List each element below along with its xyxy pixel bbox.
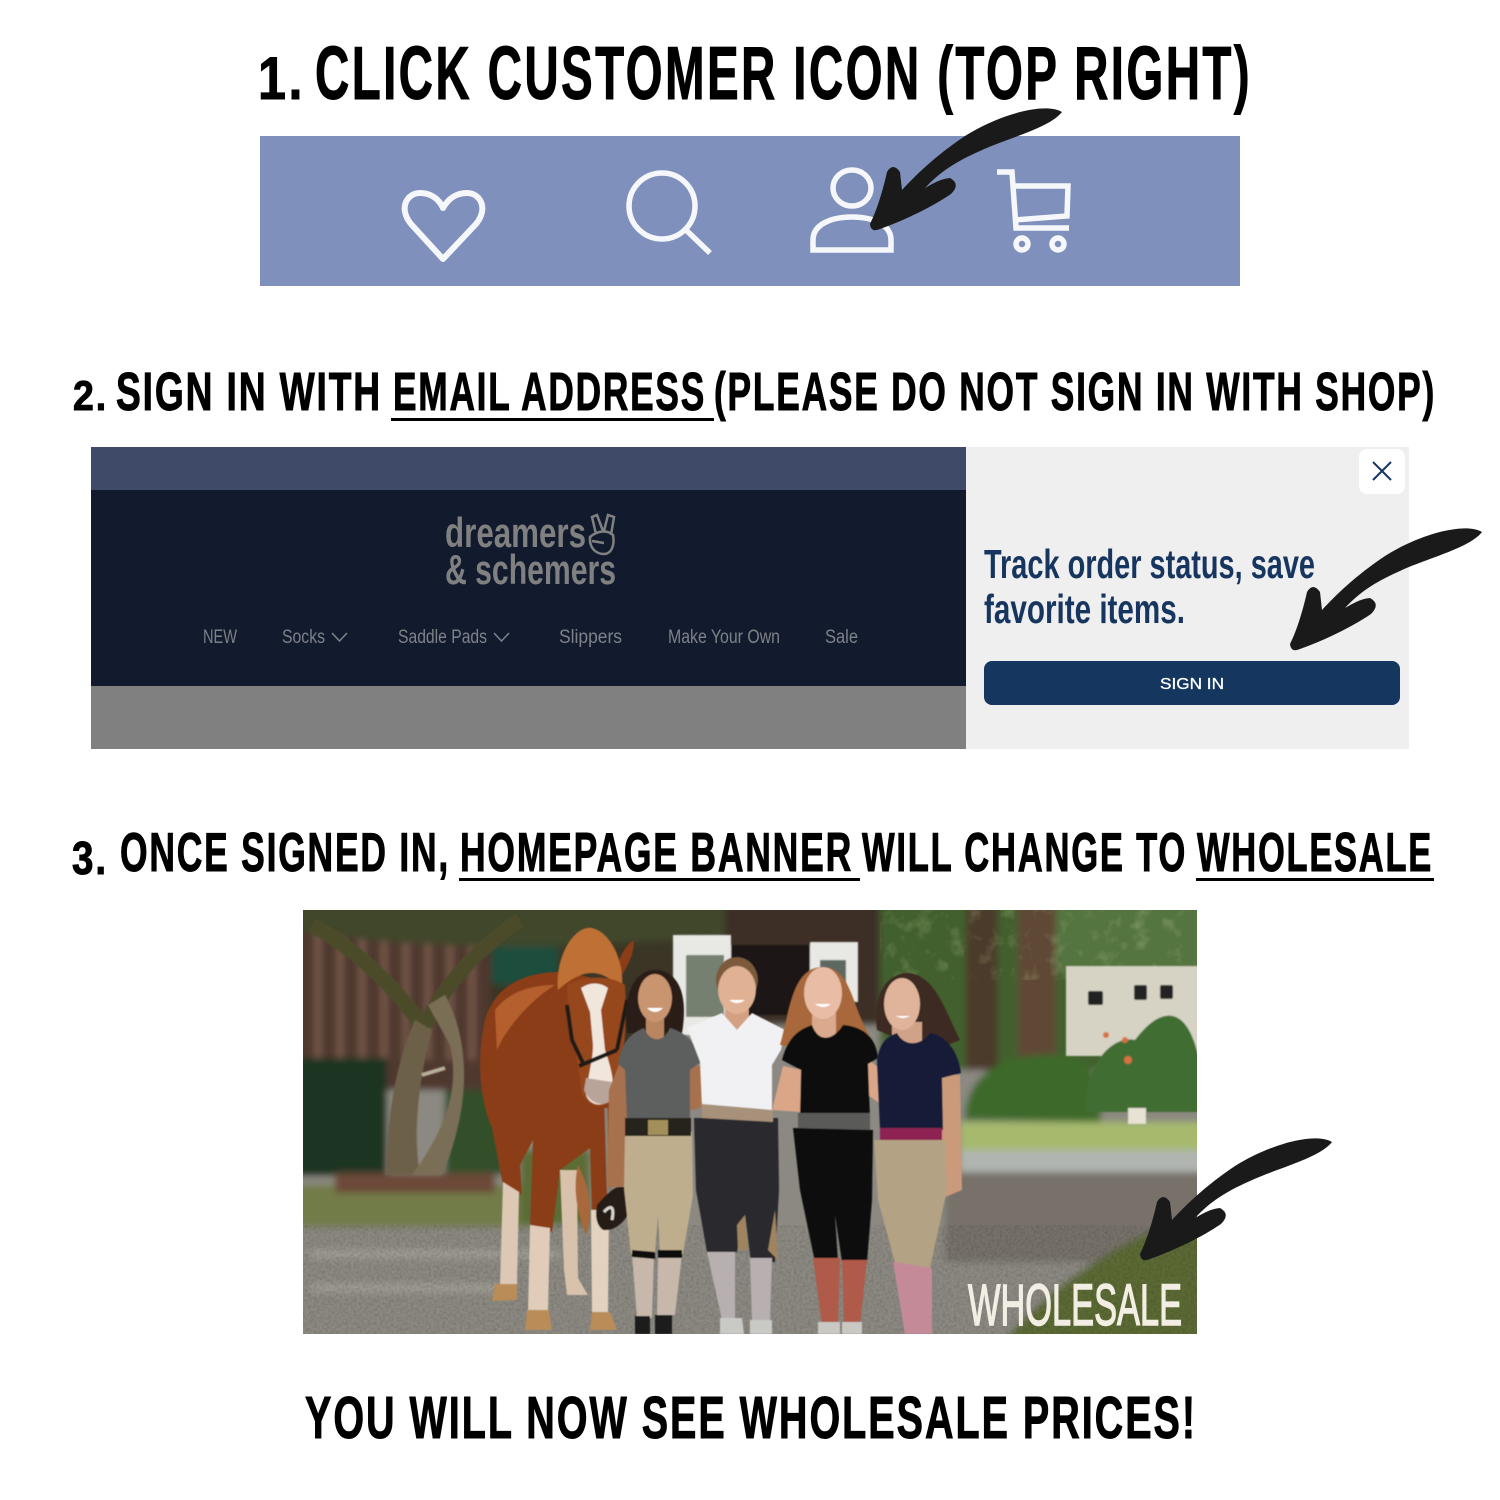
heading: step 2: EMAIL ADDRESS — [393, 362, 706, 422]
sign in button — [984, 661, 1400, 705]
heading: step 3: WILL CHANGE TO — [862, 821, 1187, 883]
panel: wholesale homepage banner photo — [295, 900, 1210, 1345]
panel: store screenshot with sign-in drawer — [91, 447, 1409, 749]
navigation: NEW — [203, 627, 237, 648]
icon: customer — [813, 170, 891, 250]
navigation: Socks — [282, 627, 325, 648]
icon: peace hand — [590, 515, 614, 554]
heading: step 3 — [72, 821, 1434, 884]
navigation: Saddle Pads — [398, 627, 487, 648]
arrow: to customer icon — [870, 108, 1062, 230]
photo background — [295, 900, 1210, 1345]
navigation — [203, 627, 858, 648]
icon: cart — [997, 172, 1069, 250]
person: black shirt — [772, 967, 882, 1334]
logo: & schemers — [445, 546, 616, 593]
text: wholesale label: WHOLESALE — [968, 1273, 1182, 1338]
drawer message: Track order status, save — [984, 541, 1315, 587]
heading: step 3: ONCE SIGNED IN, — [120, 821, 450, 883]
heading: step 3: 3. — [72, 832, 108, 884]
drawer message — [984, 541, 1315, 632]
gravel grain — [303, 1225, 1197, 1335]
person: white shirt — [687, 957, 785, 1334]
navigation: Make Your Own — [668, 627, 780, 648]
icon: search — [629, 173, 710, 253]
horse body — [480, 972, 625, 1232]
horse white stockings and hooves — [492, 1182, 617, 1330]
heading: step 3: HOMEPAGE BANNER — [460, 821, 853, 883]
lead rope — [606, 1108, 610, 1225]
trailer — [1066, 966, 1205, 1124]
icon: heart — [405, 193, 482, 259]
horse — [480, 928, 634, 1330]
foliage highlights — [880, 910, 1200, 980]
heading: step 2 — [73, 362, 1436, 422]
logo — [445, 509, 616, 593]
tree — [312, 920, 520, 1175]
sign in button: SIGN IN — [1160, 676, 1224, 693]
person: navy shirt — [874, 973, 962, 1334]
heading: step 2: 2. — [73, 372, 108, 419]
person: grey shirt — [607, 970, 706, 1334]
horse far legs and tail — [560, 1170, 588, 1295]
drawer message: favorite items. — [984, 586, 1185, 632]
heading: step 2: SIGN IN WITH — [116, 362, 382, 422]
logo: dreamers — [445, 509, 586, 556]
arrow: to sign in button — [1290, 528, 1482, 650]
close button — [1359, 449, 1405, 494]
navigation: Slippers — [559, 627, 622, 648]
horse head — [558, 928, 634, 1106]
navigation: Sale — [825, 627, 858, 648]
arrow: to wholesale banner — [1140, 1138, 1332, 1260]
barn window and door — [673, 935, 858, 1035]
panel: site header icons — [260, 136, 1240, 286]
heading: step 1: 1. — [258, 45, 305, 112]
